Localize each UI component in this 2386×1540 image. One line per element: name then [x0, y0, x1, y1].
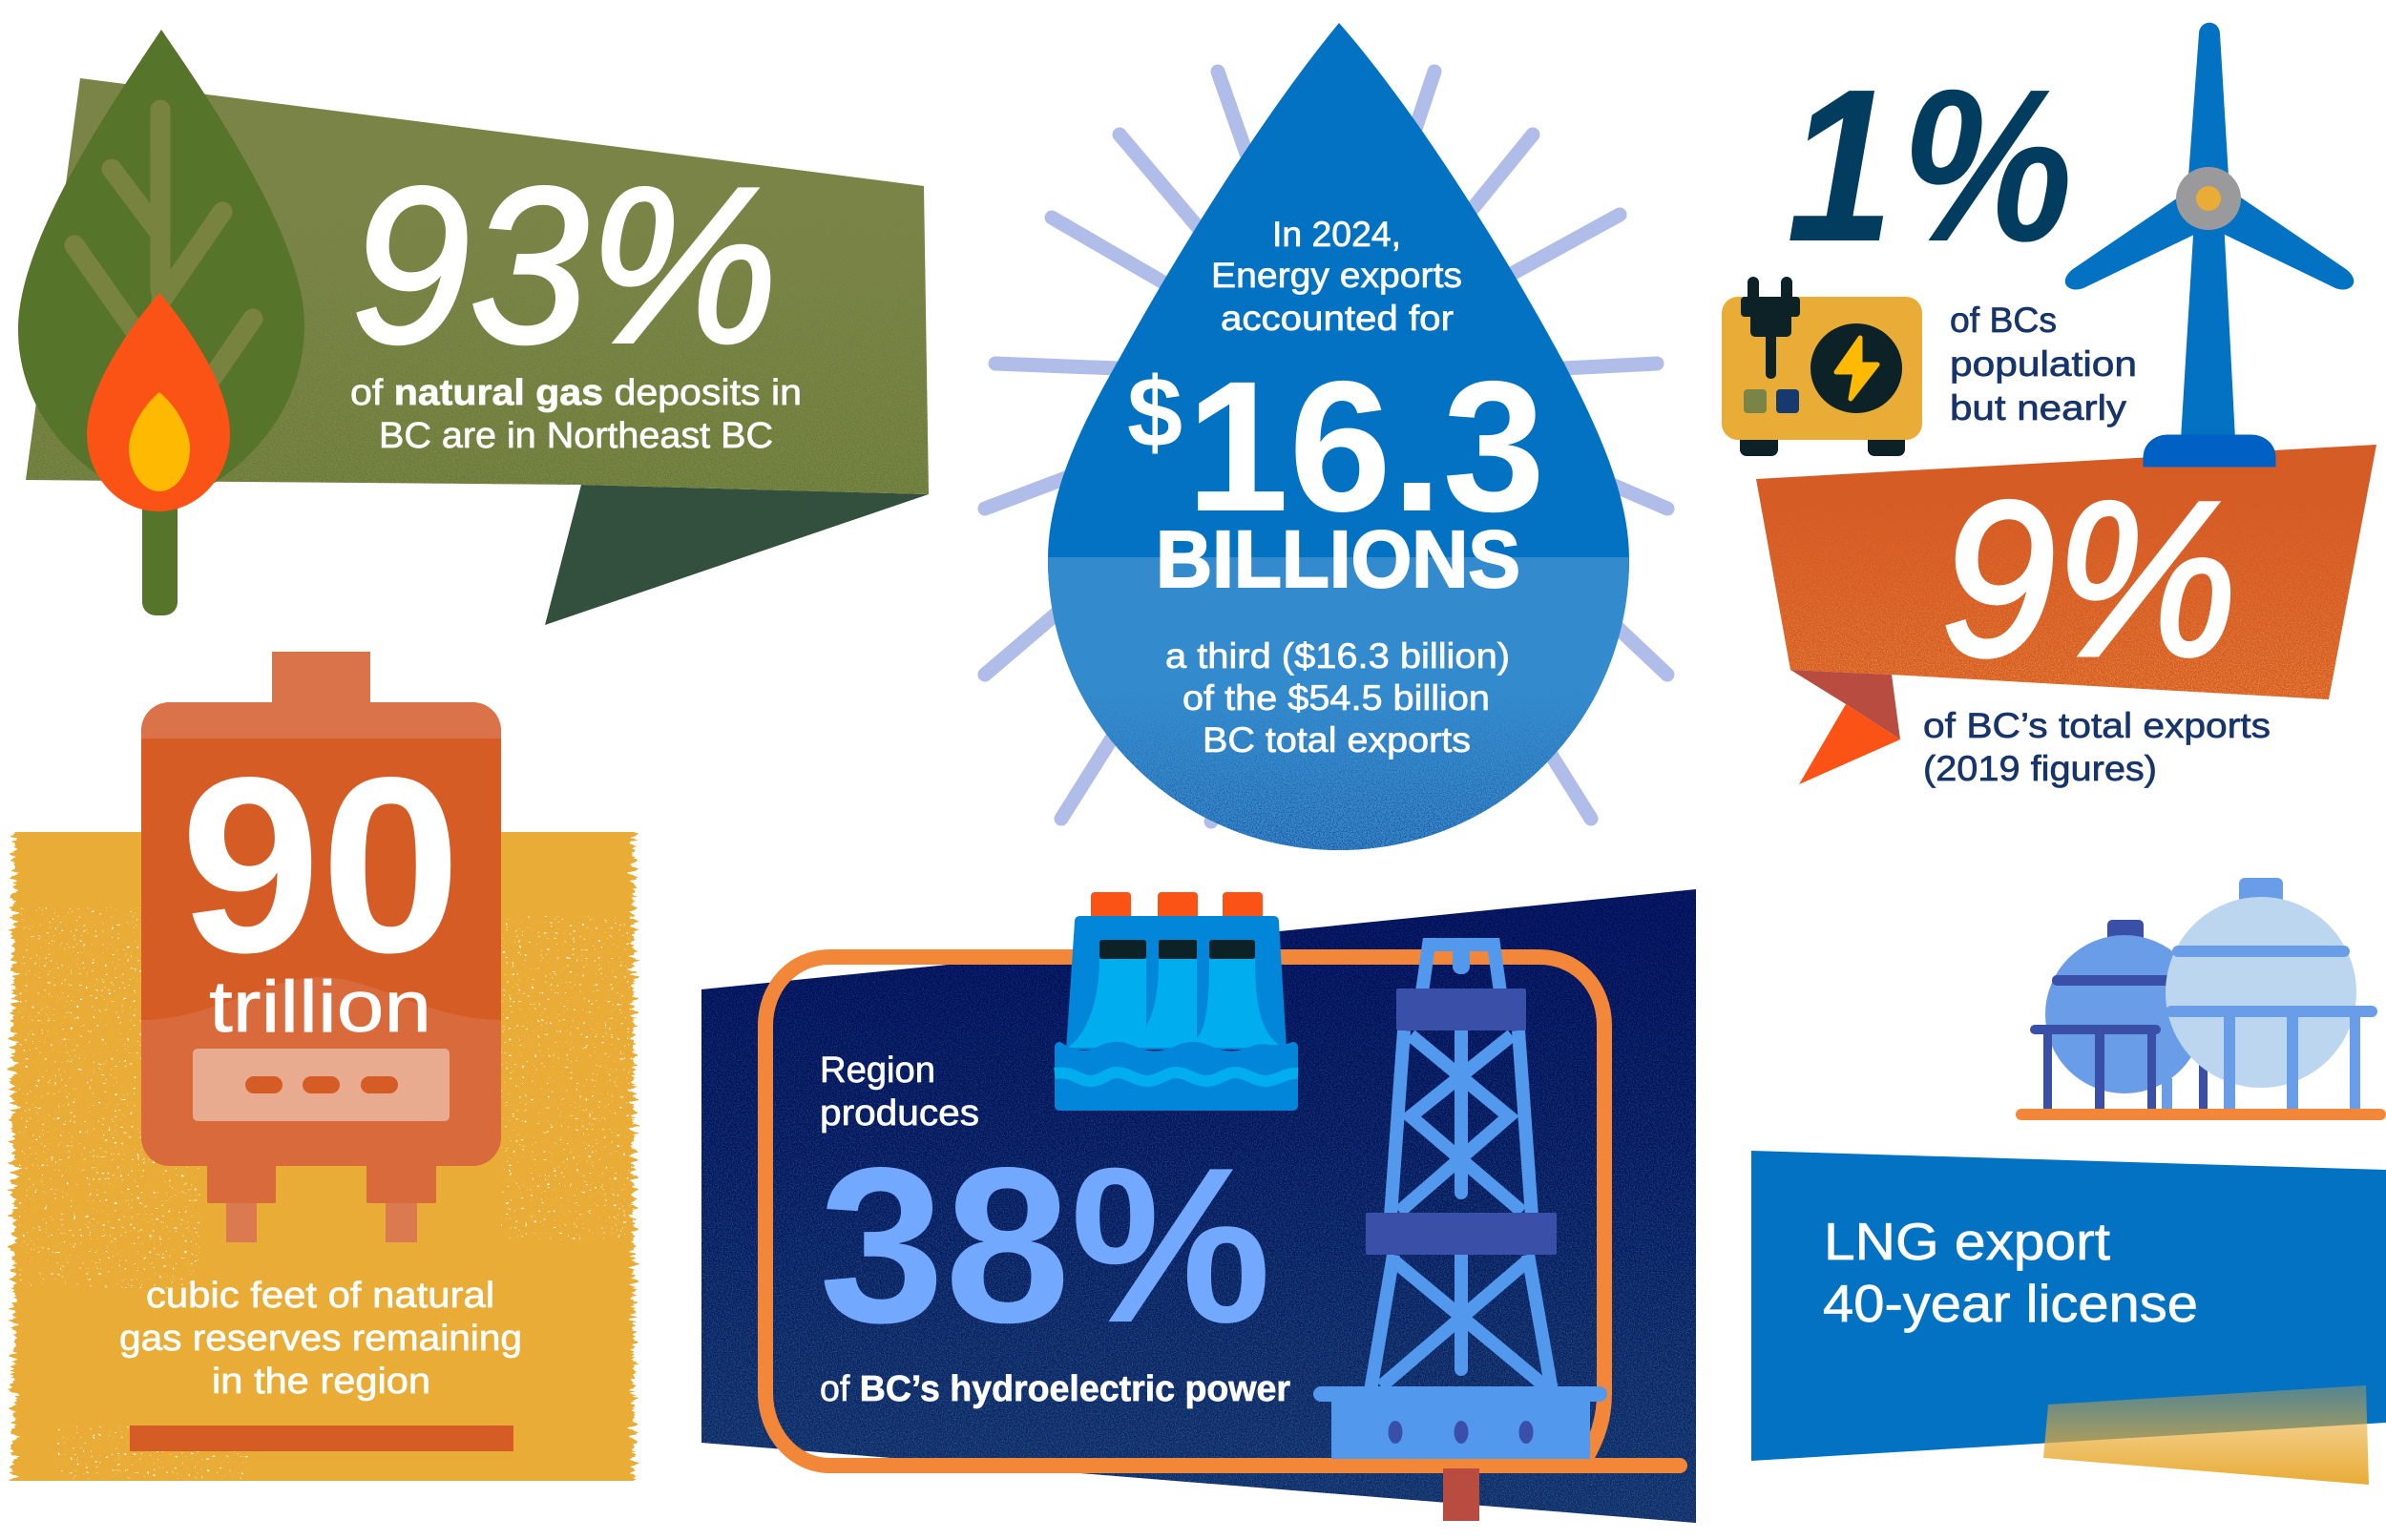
text: a third of exports: of the $54.5 billion: [1183, 678, 1490, 718]
text: cubic feet description: gas reserves remaining: [119, 1319, 522, 1359]
text: a third of exports: BC total exports: [1203, 720, 1471, 760]
text: intro: accounted for: [1221, 299, 1454, 338]
text: intro: [1211, 215, 1462, 338]
icon: oil derrick: [1313, 945, 1607, 1521]
accent: yellow ribbon strip: [2043, 1385, 2369, 1485]
text: natural gas description: of natural gas deposits in: [350, 373, 802, 413]
water drop: [1040, 23, 1637, 854]
panel: hydroelectric power: [701, 889, 1696, 1523]
frame: orange pipe: [765, 957, 1680, 1466]
text: region produces: [820, 1051, 979, 1134]
banner: green ribbon: [26, 78, 929, 625]
stat: $16.3 billions: BILLIONS: [1156, 514, 1520, 604]
stat: $16.3 billions: 16.3: [1186, 343, 1545, 551]
text: of BCs population: but nearly: [1950, 388, 2127, 427]
text: natural gas description: BC are in Northeast BC: [379, 416, 773, 456]
icon: leaf with flame: [18, 30, 304, 615]
text: LNG license: [1823, 1212, 2198, 1333]
text: a third of exports: a third ($16.3 billion): [1165, 636, 1510, 676]
panel: LNG export: [1751, 878, 2386, 1485]
text: region produces: Region: [820, 1051, 935, 1091]
text: cubic feet description: in the region: [212, 1362, 430, 1402]
stat: 1%: [1787, 45, 2073, 287]
text: cubic feet description: [119, 1276, 522, 1402]
text: of BCs population: population: [1950, 344, 2137, 384]
icon: wind turbine: [2065, 23, 2354, 467]
stat: 93%: 93%: [351, 142, 778, 389]
icon: generator: [1722, 277, 1922, 456]
banner: orange ribbon: [1756, 445, 2376, 784]
bar: orange underline: [130, 1426, 513, 1451]
stat: 1%: 1: [1787, 45, 1894, 287]
text: intro: Energy exports: [1211, 256, 1462, 295]
banner: blue block: [1751, 1151, 2386, 1461]
icon: hydro dam: [1055, 892, 1298, 1111]
icon: boiler: [141, 652, 501, 1242]
stat: $16.3 billions: [1127, 343, 1545, 604]
panel: population and exports: [1722, 23, 2376, 788]
stat: $16.3 billions: $: [1127, 358, 1183, 468]
stat: 90 trillion: trillion: [209, 967, 431, 1048]
text: region produces: produces: [820, 1093, 979, 1134]
icon: storage tanks: [2016, 878, 2386, 1120]
rays around drop: [985, 72, 1667, 822]
text: of total exports: [1923, 706, 2271, 788]
text: of total exports: (2019 figures): [1923, 749, 2157, 788]
background: navy block: [701, 889, 1696, 1523]
panel: gas reserves: [13, 652, 635, 1491]
text: LNG license: 40-year license: [1823, 1274, 2198, 1333]
text: of BCs population: of BCs: [1950, 301, 2057, 340]
stat: 9%: 9%: [1941, 456, 2237, 701]
text: a third of exports: [1165, 636, 1510, 760]
text: intro: In 2024,: [1272, 215, 1401, 254]
stat: 38%: 38%: [819, 1122, 1271, 1369]
text: cubic feet description: cubic feet of natural: [146, 1276, 494, 1316]
panel: natural gas 93 percent: [18, 30, 929, 625]
panel: energy exports drop: [985, 23, 1667, 854]
background: yellow rough block: [13, 843, 635, 1491]
text: of BCs population: [1950, 301, 2137, 427]
text: LNG license: LNG export: [1824, 1212, 2110, 1271]
text: natural gas description: [350, 373, 802, 456]
text: hydroelectric power: of BC’s hydroelectric power: [820, 1369, 1290, 1409]
stat: 1%: %: [1901, 45, 2073, 287]
stat: 90 trillion: 90: [180, 725, 461, 1005]
text: of total exports: of BC’s total exports: [1923, 706, 2271, 745]
